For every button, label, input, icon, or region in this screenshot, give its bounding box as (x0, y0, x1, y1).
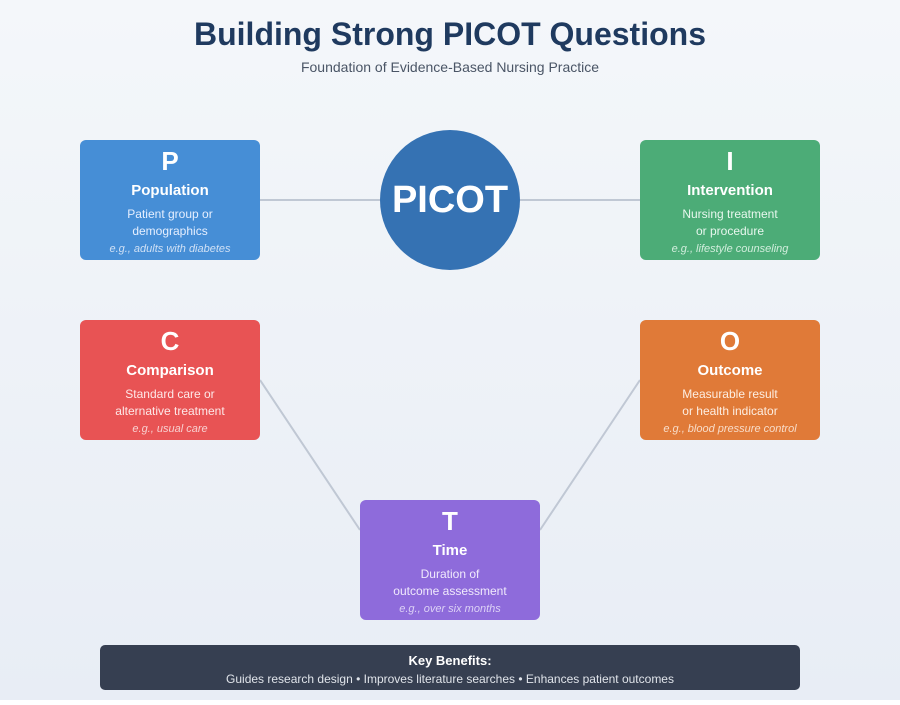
card: Outcome: or health indicator (682, 404, 778, 418)
card: Comparison: alternative treatment (115, 404, 225, 418)
card: Population: Patient group or (127, 207, 213, 221)
card: Intervention: I (726, 146, 734, 176)
card: Intervention: Nursing treatment (682, 207, 778, 221)
card: Comparison: Standard care or (125, 387, 215, 401)
card: Time: e.g., over six months (399, 603, 501, 615)
card: Outcome: O (720, 326, 740, 356)
card: Time: Time (433, 542, 467, 559)
card: Comparison: C (161, 326, 180, 356)
card: Comparison: e.g., usual care (132, 423, 208, 435)
card: Outcome: e.g., blood pressure control (663, 423, 797, 435)
card: Outcome: Outcome (697, 362, 763, 379)
center circle: PICOT: PICOT (392, 179, 508, 221)
key benefits bar: Guides research design • Improves literature searches • Enhances patient outcomes (226, 672, 674, 686)
card: Population: e.g., adults with diabetes (109, 243, 231, 255)
card: Comparison (80, 320, 260, 440)
card: Time: T (442, 506, 458, 536)
card: Outcome: Measurable result (682, 387, 778, 401)
card: Population: Population (131, 182, 209, 199)
card: Comparison: Comparison (126, 362, 214, 379)
center circle: PICOT (380, 130, 520, 270)
card: Intervention: or procedure (696, 224, 764, 238)
card: Intervention: e.g., lifestyle counseling (672, 243, 789, 255)
title: Building Strong PICOT Questions (194, 16, 706, 52)
card: Outcome (640, 320, 820, 440)
subtitle: Foundation of Evidence-Based Nursing Practice (301, 59, 599, 75)
key benefits bar (100, 645, 800, 690)
card: Intervention: Intervention (687, 182, 773, 199)
card: Population: P (161, 146, 179, 176)
card: Time: outcome assessment (393, 584, 507, 598)
card: Population (80, 140, 260, 260)
connector lines (260, 200, 640, 530)
key benefits bar: Key Benefits: (408, 653, 492, 668)
card: Intervention (640, 140, 820, 260)
card: Time (360, 500, 540, 620)
card: Time: Duration of (421, 567, 480, 581)
card: Population: demographics (132, 224, 208, 238)
